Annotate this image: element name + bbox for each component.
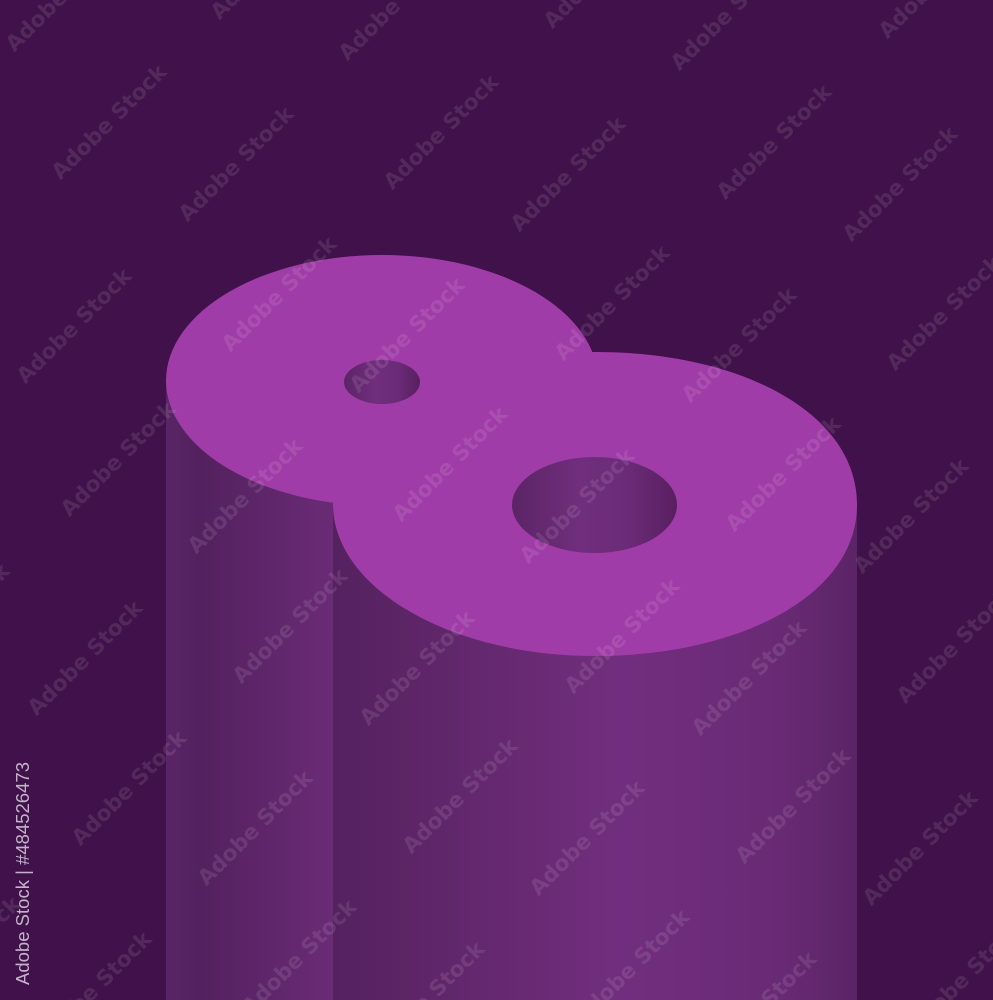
watermark pattern: Adobe Stock — [858, 785, 983, 911]
left column side — [166, 381, 333, 1000]
watermark pattern: Adobe Stock — [560, 573, 685, 699]
watermark pattern: Adobe Stock — [550, 240, 675, 366]
watermark pattern: Adobe Stock — [56, 396, 181, 522]
vertical credit text: Adobe Stock | #484526473 — [12, 762, 33, 985]
watermark pattern: Adobe Stock — [228, 563, 353, 689]
small hole — [344, 360, 420, 404]
watermark pattern: Adobe Stock — [677, 282, 802, 408]
watermark pattern: Adobe Stock — [388, 401, 513, 527]
watermark pattern: Adobe Stock — [12, 263, 137, 389]
watermark pattern: Adobe Stock — [193, 765, 318, 891]
watermark pattern: Adobe Stock — [525, 775, 650, 901]
watermark pattern: Adobe Stock — [838, 121, 963, 247]
watermark pattern: Adobe Stock — [515, 443, 640, 569]
watermark pattern: Adobe Stock — [506, 111, 631, 237]
watermark pattern: Adobe Stock — [849, 453, 974, 579]
watermark pattern: Adobe Stock — [23, 595, 148, 721]
watermark pattern: Adobe Stock — [67, 725, 192, 851]
watermark pattern: Adobe Stock — [379, 69, 504, 195]
top face of the 8 — [166, 255, 857, 656]
watermark pattern: Adobe Stock — [174, 101, 299, 227]
right column side — [333, 504, 857, 1000]
watermark pattern: Adobe Stock — [355, 605, 480, 731]
large hole — [512, 457, 677, 553]
watermark pattern: Adobe Stock — [47, 59, 172, 185]
watermark pattern: Adobe Stock — [687, 615, 812, 741]
watermark pattern: Adobe Stock — [712, 79, 837, 205]
watermark pattern: Adobe Stock — [731, 743, 856, 869]
watermark pattern: Adobe Stock — [217, 231, 342, 357]
watermark pattern: Adobe Stock — [398, 733, 523, 859]
watermark pattern: Adobe Stock — [345, 272, 470, 398]
watermark pattern: Adobe Stock — [183, 433, 308, 559]
watermark pattern: Adobe Stock — [721, 411, 846, 537]
